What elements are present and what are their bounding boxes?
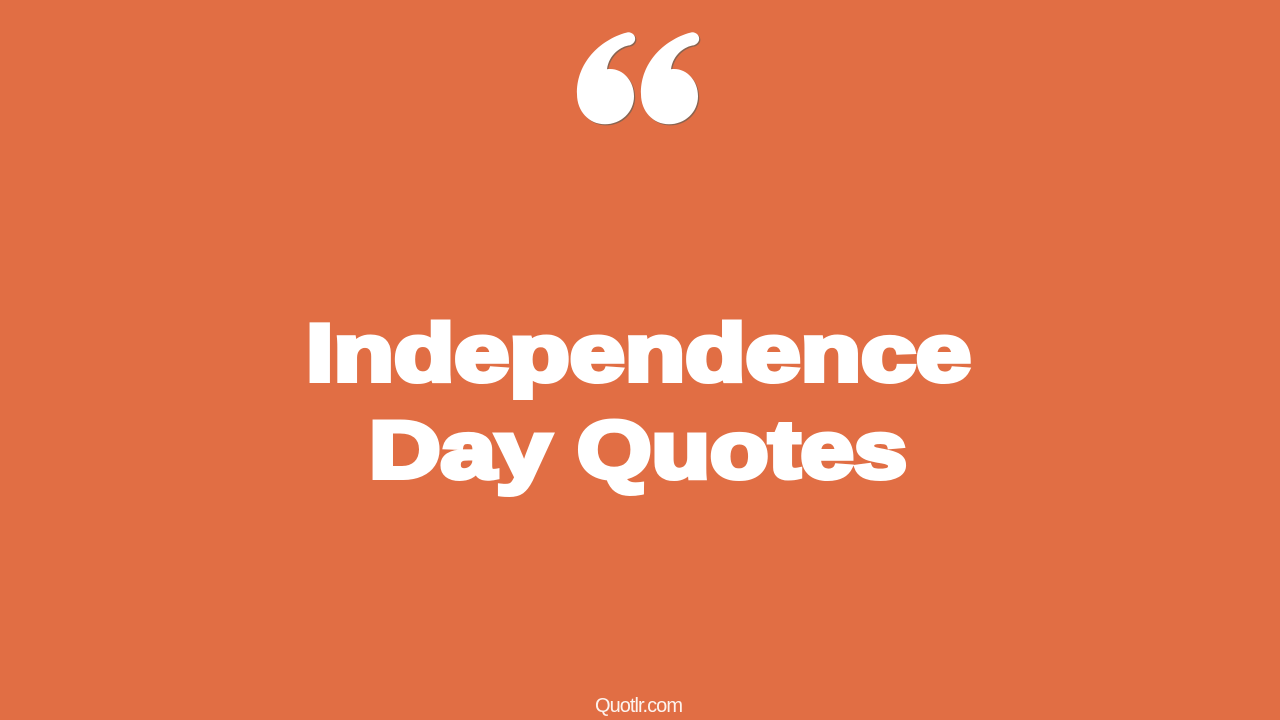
title: Independence bbox=[306, 308, 971, 398]
title: Quotes bbox=[577, 406, 907, 496]
icon: quotation marks bbox=[577, 32, 700, 125]
title: Day bbox=[369, 406, 551, 496]
footer: site name: Quotlr.com bbox=[595, 695, 683, 717]
title bbox=[306, 308, 971, 496]
